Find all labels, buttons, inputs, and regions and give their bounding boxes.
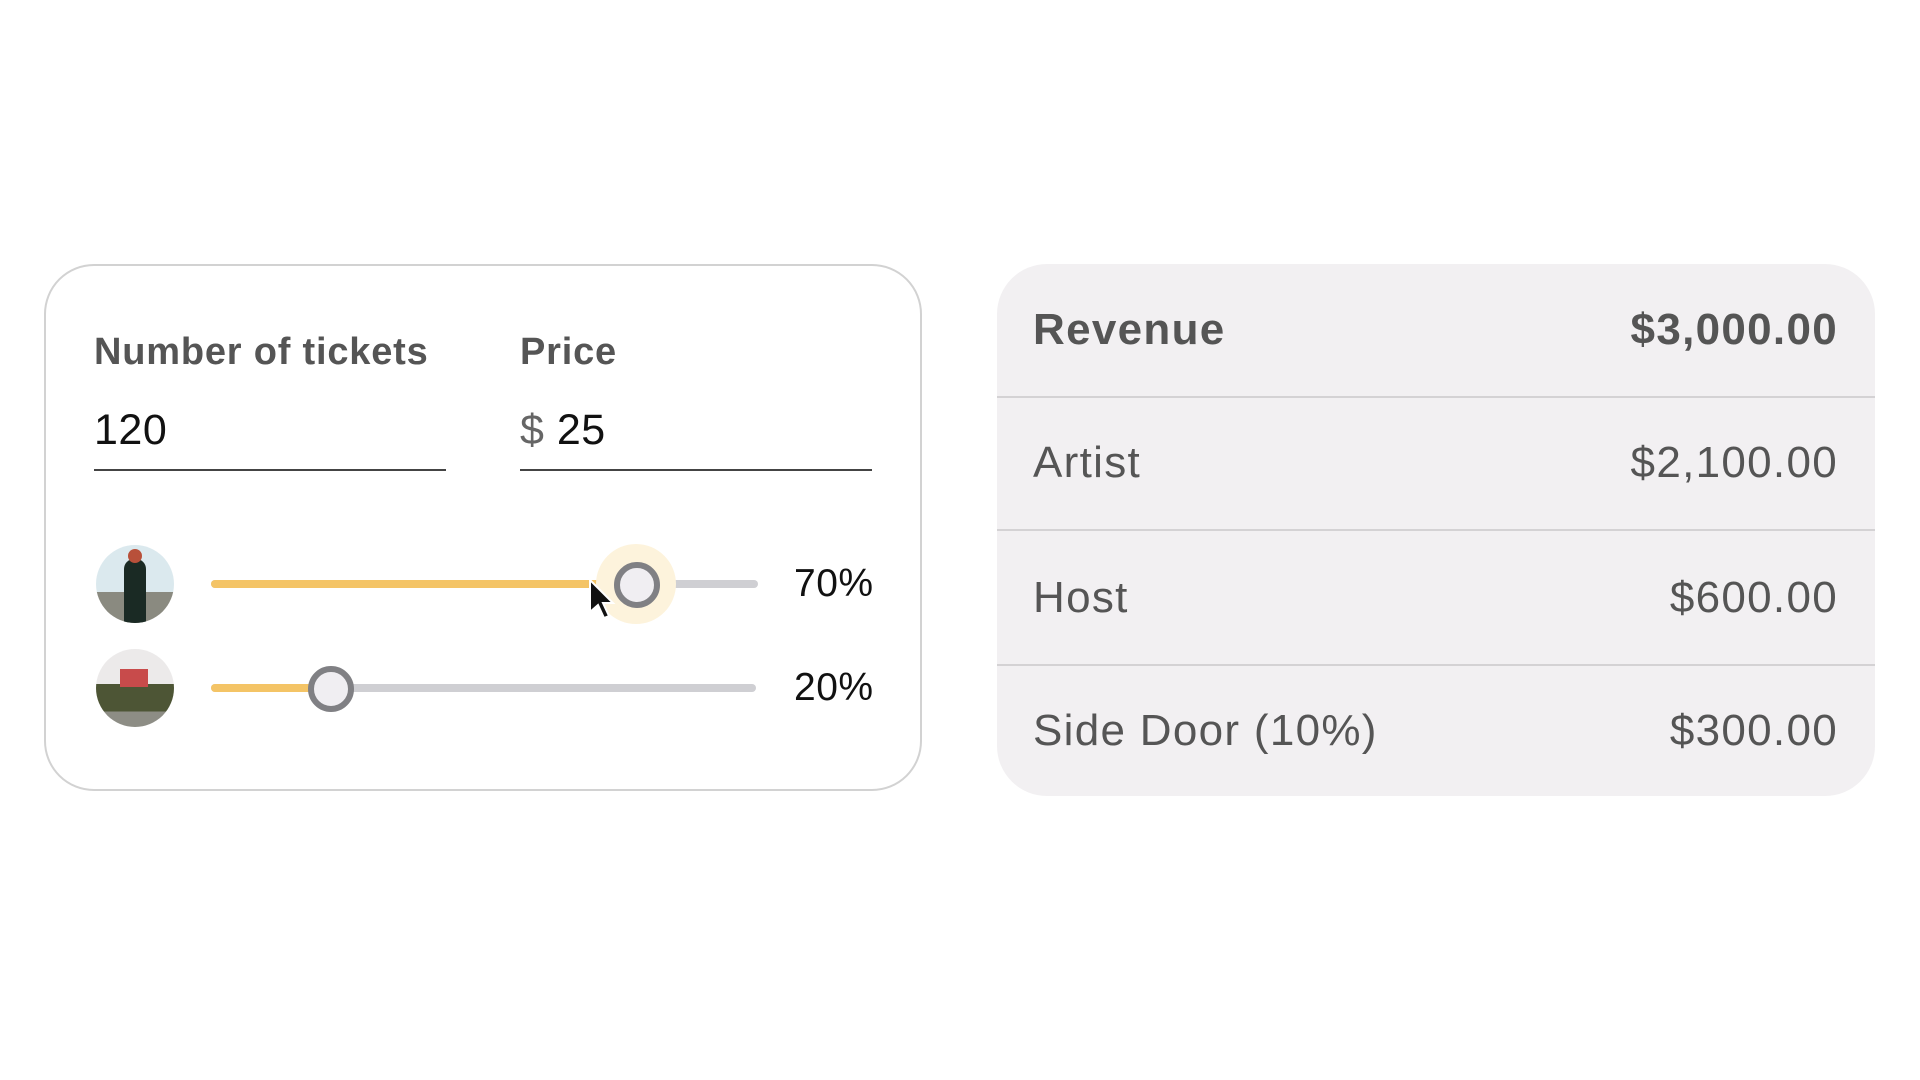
icon: cursor (589, 580, 616, 617)
row: host: $600.00 (1670, 573, 1838, 622)
row: side door: Side Door (10%) (1033, 706, 1378, 755)
row: revenue: $3,000.00 (1631, 305, 1838, 354)
panel: inputs (44, 264, 922, 791)
row: side door: $300.00 (1670, 706, 1838, 755)
input: tickets: 120 (94, 406, 167, 454)
avatar: artist (96, 545, 174, 623)
avatar: host (96, 649, 174, 727)
row: artist (1033, 438, 1838, 487)
row: artist: Artist (1033, 438, 1141, 487)
text: 70%: 70% (794, 562, 874, 605)
input: tickets (94, 406, 446, 471)
row: side door (1033, 706, 1838, 755)
row: revenue (1033, 305, 1838, 354)
label: price: Price (520, 331, 617, 373)
slider: artist 70% (211, 544, 758, 624)
panel: revenue breakdown (997, 264, 1875, 796)
input: price (520, 406, 872, 471)
label: number of tickets: Number of tickets (94, 331, 429, 373)
row: artist: $2,100.00 (1631, 438, 1838, 487)
text: 20%: 20% (794, 666, 874, 709)
row: revenue: Revenue (1033, 305, 1226, 354)
input: price: $ 25 (520, 406, 606, 454)
row: host (1033, 573, 1838, 622)
row: host: Host (1033, 573, 1129, 622)
slider: host 20% (211, 666, 756, 712)
